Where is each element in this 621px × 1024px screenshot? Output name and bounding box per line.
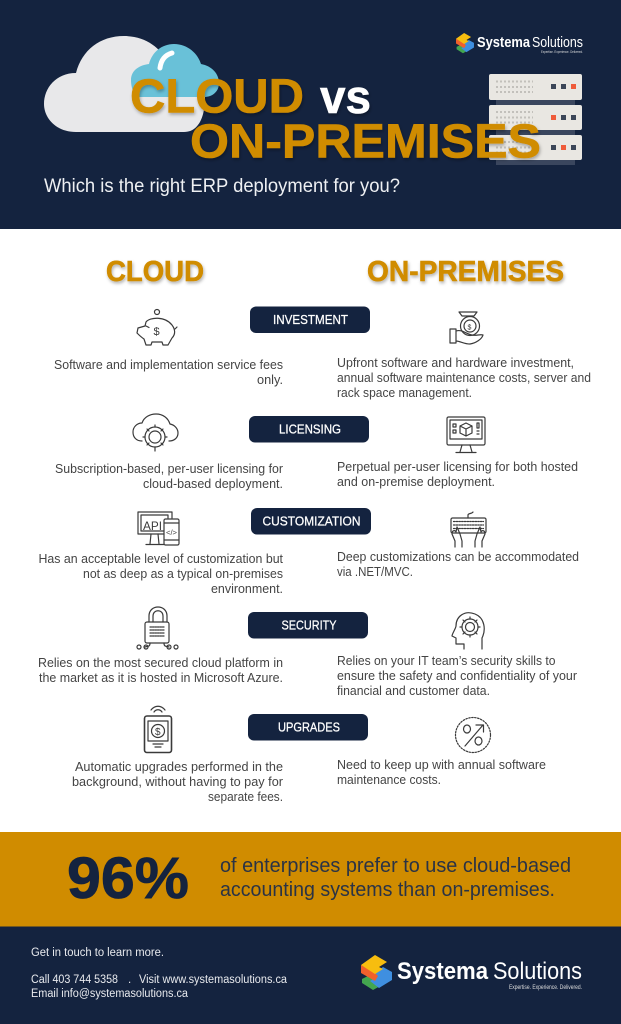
badge: licensing bbox=[249, 416, 369, 442]
column heading: on-premises: ON-PREMISES bbox=[367, 256, 564, 288]
badge: investment: INVESTMENT bbox=[273, 313, 348, 327]
text: cloud licensing bbox=[55, 461, 284, 491]
icon: cloud with gear bbox=[133, 414, 178, 451]
text: on-premises upgrades bbox=[337, 757, 546, 787]
logo: top: Systema bbox=[477, 35, 531, 51]
contact details bbox=[31, 947, 288, 1000]
row: customization bbox=[38, 508, 579, 596]
contact details: Call 403 744 5358 bbox=[31, 974, 118, 986]
contact details: Email info@systemasolutions.ca bbox=[31, 988, 189, 1000]
row: upgrades bbox=[72, 706, 546, 804]
text: cloud security: Relies on the most secured cloud platform in bbox=[38, 655, 283, 670]
text: cloud licensing: cloud-based deployment. bbox=[143, 476, 283, 491]
text: cloud customization: not as deep as a typical on-premises bbox=[83, 566, 283, 581]
logo: footer: Expertise. Experience. Delivered. bbox=[509, 985, 582, 991]
icon: piggy bank bbox=[137, 310, 177, 345]
badge: upgrades bbox=[248, 714, 368, 740]
icon: blue cloud bbox=[131, 44, 219, 97]
logo: footer: Systema bbox=[397, 958, 489, 985]
text: on-premises investment: rack space management. bbox=[337, 385, 472, 400]
badge: upgrades: UPGRADES bbox=[278, 720, 340, 734]
icon: hands on keyboard bbox=[451, 512, 486, 547]
statistic description bbox=[220, 854, 571, 901]
icon: server rack bbox=[489, 74, 582, 165]
text: on-premises security bbox=[337, 653, 578, 698]
statistic: 96%: 96% bbox=[67, 846, 189, 911]
title bbox=[130, 70, 541, 168]
badge: customization: CUSTOMIZATION bbox=[262, 514, 360, 528]
stat banner bbox=[0, 832, 621, 926]
text: on-premises upgrades: maintenance costs. bbox=[337, 772, 441, 787]
badge: security bbox=[248, 612, 368, 638]
footer panel bbox=[0, 926, 621, 1024]
contact details: Visit www.systemasolutions.ca bbox=[139, 974, 288, 986]
logo: footer: Solutions bbox=[493, 958, 582, 985]
icon: white cloud bbox=[44, 36, 205, 132]
text: on-premises investment bbox=[337, 355, 591, 400]
text: cloud security: the market as it is hosted in Microsoft Azure. bbox=[39, 670, 283, 685]
icon: API devices: </> bbox=[166, 528, 178, 537]
text: on-premises customization: Deep customizations can be accommodated bbox=[337, 549, 579, 564]
text: on-premises security: Relies on your IT team’s security skills to bbox=[337, 653, 556, 668]
icon: padlock circuit bbox=[137, 607, 178, 649]
statistic description: accounting systems than on-premises. bbox=[220, 878, 555, 901]
text: cloud licensing: Subscription-based, per-user licensing for bbox=[55, 461, 284, 476]
text: cloud customization bbox=[38, 551, 283, 596]
icon: API devices: API bbox=[143, 519, 162, 533]
title: CLOUD bbox=[130, 70, 304, 124]
text: on-premises licensing: Perpetual per-user licensing for both hosted bbox=[337, 459, 578, 474]
icon: smartphone with dollar bbox=[144, 706, 172, 752]
text: on-premises licensing bbox=[337, 459, 578, 489]
contact details: . bbox=[128, 974, 131, 986]
badge: investment bbox=[250, 306, 370, 333]
icon: smartphone with dollar: $ bbox=[155, 727, 161, 738]
text: cloud upgrades: separate fees. bbox=[208, 789, 283, 804]
text: cloud customization: environment. bbox=[211, 581, 283, 596]
text: cloud customization: Has an acceptable level of customization but bbox=[38, 551, 283, 566]
icon: piggy bank: $ bbox=[154, 326, 160, 338]
text: on-premises investment: Upfront software and hardware investment, bbox=[337, 355, 574, 370]
contact details: Get in touch to learn more. bbox=[31, 947, 164, 959]
icon: head with gear bbox=[452, 613, 484, 649]
row: licensing bbox=[55, 414, 578, 491]
text: on-premises investment: annual software maintenance costs, server and bbox=[337, 370, 591, 385]
column heading: cloud: CLOUD bbox=[106, 256, 204, 288]
icon: API devices bbox=[138, 512, 179, 545]
row: investment bbox=[54, 306, 591, 400]
logo: footer bbox=[361, 955, 582, 991]
text: cloud investment: only. bbox=[257, 372, 283, 387]
logo: top: Solutions bbox=[532, 35, 583, 51]
icon: hand with money bag: $ bbox=[468, 324, 472, 332]
text: cloud upgrades: Automatic upgrades performed in the bbox=[75, 759, 283, 774]
text: on-premises security: ensure the safety and confidentiality of your bbox=[337, 668, 578, 683]
text: cloud investment bbox=[54, 357, 283, 387]
text: cloud security bbox=[38, 655, 283, 685]
text: on-premises customization bbox=[337, 549, 579, 579]
title: ON-PREMISES bbox=[190, 116, 541, 168]
text: on-premises licensing: and on-premise deployment. bbox=[337, 474, 495, 489]
subtitle: Which is the right ERP deployment for you? bbox=[44, 176, 400, 197]
badge: licensing: LICENSING bbox=[279, 422, 341, 436]
text: on-premises customization: via .NET/MVC. bbox=[337, 564, 413, 579]
icon: monitor with box bbox=[447, 417, 485, 452]
badge: customization bbox=[251, 508, 371, 534]
header panel bbox=[0, 0, 621, 229]
text: cloud upgrades: background, without having to pay for bbox=[72, 774, 284, 789]
text: cloud investment: Software and implementation service fees bbox=[54, 357, 283, 372]
statistic description: of enterprises prefer to use cloud-based bbox=[220, 854, 571, 877]
logo: top bbox=[456, 33, 583, 54]
text: on-premises upgrades: Need to keep up with annual software bbox=[337, 757, 546, 772]
text: cloud upgrades bbox=[72, 759, 284, 804]
icon: percent with arrow bbox=[456, 718, 490, 752]
icon: hand with money bag bbox=[450, 312, 483, 344]
title: vs bbox=[320, 70, 371, 123]
badge: security: SECURITY bbox=[282, 618, 337, 632]
logo: top: Expertise. Experience. Delivered. bbox=[541, 50, 583, 54]
row: security bbox=[38, 607, 578, 698]
text: on-premises security: financial and customer data. bbox=[337, 683, 490, 698]
